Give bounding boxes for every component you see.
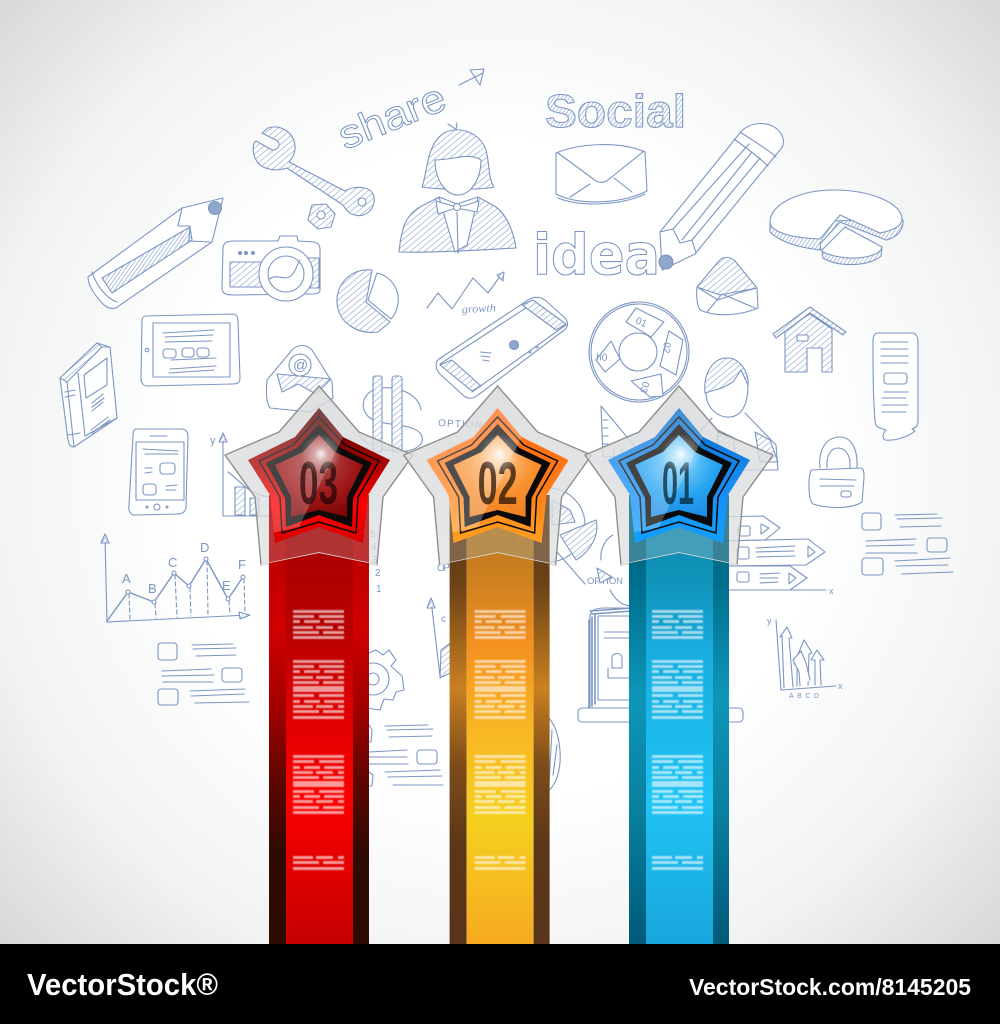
doodle: y axis chart behind star 03: y [210, 435, 216, 447]
doodle: smartphone [436, 297, 567, 398]
doodle: donut chart with numbered tabs [589, 302, 689, 402]
star frame 03 glass [225, 386, 413, 575]
doodle: growth zigzag arrow [427, 272, 504, 316]
doodle: arrow bar chart: y [767, 616, 772, 626]
doodle: axis numbers beside ribbon: 1 [376, 584, 382, 595]
doodle: axis numbers beside ribbon: 2 [375, 568, 381, 579]
doodle: triangle ruler [601, 406, 642, 457]
doodle: ABCDEF line chart: E [222, 578, 231, 593]
doodle: ABCDEF line chart: F [238, 557, 246, 572]
doodle: growth zigzag arrow: growth [462, 302, 497, 316]
doodle: right info block [862, 513, 953, 575]
doodle: arrow bar chart [767, 616, 843, 700]
doodle: arrow bar chart: x [838, 681, 843, 691]
doodle: info block between ribbons [369, 725, 443, 786]
doodle: option labels: OPTION [438, 418, 482, 431]
ribbon 03 text lines [293, 610, 344, 870]
doodle: arrow bar chart: ABCD [789, 693, 819, 700]
number 02: 02 [478, 450, 518, 517]
doodle: option labels [437, 418, 623, 587]
doodle: ABCDEF line chart: C [168, 555, 177, 570]
doodle: laptop monitor behind blue ribbon [578, 608, 743, 722]
doodle: ABCDEF line chart [101, 534, 250, 622]
doodle: house [773, 307, 846, 372]
doodle sketches [60, 69, 953, 791]
doodle: labelled arrows: x [829, 586, 834, 596]
doodle: left info block [158, 643, 249, 705]
ribbon 02 [404, 386, 592, 944]
star badge 02 [426, 408, 568, 543]
doodle: donut chart with numbered tabs: 01 [634, 316, 649, 330]
doodle: left phone [129, 429, 188, 515]
doodle: donut chart with numbered tabs: 03 [637, 380, 651, 394]
star frame 01 glass [585, 386, 773, 575]
footer image id: VectorStock.com/8145205 [689, 974, 971, 1000]
doodle: woman avatar [399, 123, 516, 253]
star badge 03 [248, 408, 390, 543]
doodle: wrench [253, 127, 374, 216]
doodle: small chart between ribbons [427, 598, 452, 678]
doodle: gear [357, 650, 404, 710]
doodle: tall device [873, 333, 918, 440]
doodle: camera [222, 236, 320, 301]
doodle: ABCDEF line chart: B [148, 581, 157, 596]
doodle: donut chart with numbered tabs: 02 [660, 342, 672, 354]
star frame 02 glass [404, 386, 592, 575]
doodle: dollar sign [359, 376, 422, 452]
doodle: ABCDEF line chart: D [200, 540, 209, 555]
doodle: ABCDEF line chart: A [122, 571, 131, 586]
doodle: book [60, 343, 117, 447]
doodle: axis numbers beside ribbon: 5 [370, 529, 376, 540]
footer brand: VectorStock® [27, 967, 218, 1002]
footer bar [0, 944, 1000, 1024]
doodle: axis numbers beside ribbon [370, 529, 382, 595]
ribbon 03 [225, 386, 413, 944]
doodle: donut chart with numbered tabs: h0 [596, 352, 608, 364]
doodle: open envelope with at sign [266, 346, 333, 412]
doodle: axis numbers beside ribbon: 4 [371, 542, 377, 553]
ribbon 01 bar [629, 550, 729, 944]
doodle: left pencil [88, 198, 223, 308]
number 03: 03 [299, 450, 338, 517]
doodle: idea text: idea [533, 223, 660, 288]
doodle: open envelope with at sign: @ [293, 357, 308, 374]
doodle: globe chart behind star 02 [511, 488, 630, 606]
star badge 01: 01 [662, 450, 694, 517]
doodle: small chart between ribbons: c [441, 614, 446, 625]
doodle: 3D pie chart [770, 190, 903, 265]
doodle: option labels: OPTION [437, 563, 467, 574]
doodle: big pencil [659, 124, 784, 270]
doodle: small pie chart [337, 270, 398, 332]
ribbon 01 [585, 386, 773, 944]
ribbon 01 text lines [652, 610, 703, 870]
doodle: padlock [809, 437, 864, 508]
ribbon 02 bar [450, 550, 550, 944]
doodle: y axis chart behind star 03 [210, 433, 275, 516]
doodle: share text with arrow [332, 69, 484, 158]
doodle: share text with arrow: share [332, 76, 452, 158]
doodle: labelled arrows [710, 516, 834, 596]
doodle: option labels: OPTION [587, 576, 623, 587]
star badge 01 [608, 408, 750, 543]
doodle: oval shape beside ribbon [548, 717, 560, 791]
doodle: tablet [141, 314, 240, 386]
doodle: axis numbers beside ribbon: 3 [372, 555, 378, 566]
doodle: small open envelope [697, 257, 758, 315]
doodle: envelope [556, 145, 647, 204]
doodle: social text: Social [545, 85, 686, 137]
ribbon 02 text lines [475, 610, 526, 870]
doodle: man avatar [700, 358, 778, 470]
ribbon 03 bar [269, 550, 369, 944]
doodle: nut [308, 204, 335, 229]
